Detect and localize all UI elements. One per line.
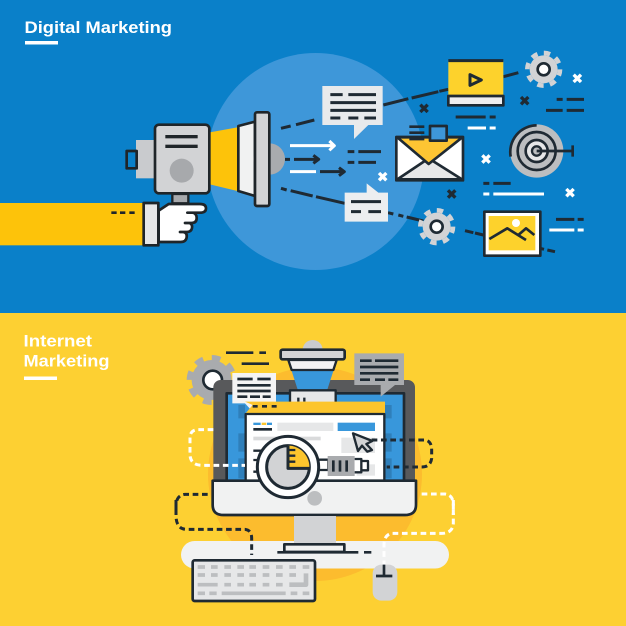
- funnel blue: [292, 371, 333, 392]
- heading underline: [24, 376, 57, 380]
- screen shadow bars: [238, 405, 392, 478]
- dashed cables: [176, 430, 453, 515]
- monitor stand: [294, 516, 336, 544]
- computer scene upper: [176, 340, 453, 515]
- gear top: [527, 53, 560, 86]
- funnel base: [290, 390, 336, 407]
- megaphone back: [136, 140, 156, 178]
- dashed cables lower: [176, 500, 453, 565]
- arm and megaphone: [0, 112, 285, 245]
- cuff: [144, 203, 158, 245]
- heading: Internet Marketing: [24, 332, 110, 370]
- mouse: [373, 565, 397, 601]
- sleeve dashes: [111, 209, 135, 217]
- light circle behind megaphone: [207, 53, 424, 270]
- cross marks: [379, 75, 581, 198]
- megaphone body: [155, 125, 209, 193]
- funnel top bar: [281, 350, 345, 359]
- handle: [172, 194, 188, 203]
- megaphone small rear rectangle: [127, 151, 137, 168]
- browser window: [246, 414, 384, 482]
- heading: Digital Marketing: Digital Marketing: [24, 18, 172, 37]
- monitor screen: [227, 393, 404, 490]
- funnel cap: [303, 340, 323, 350]
- envelope icon: [396, 126, 463, 180]
- yellow cone: [208, 127, 237, 191]
- speech bubble: gray: [354, 353, 404, 397]
- keyboard: [193, 560, 315, 601]
- text lines top: [226, 353, 269, 364]
- target icon: [510, 124, 573, 178]
- magnifier handle with plug: [317, 456, 368, 476]
- text lines right: [456, 99, 584, 230]
- video player icon: [448, 61, 503, 105]
- gear bottom: [420, 210, 453, 243]
- desk pill: [181, 541, 449, 568]
- hand: [159, 204, 206, 242]
- orange circle behind computer: [208, 367, 422, 581]
- heading: Internet Marketing: Internet: [24, 332, 92, 350]
- arrows: [285, 141, 344, 176]
- heading: Internet Marketing: Marketing: [24, 352, 110, 370]
- monitor frame: [213, 380, 415, 493]
- cursor: [353, 433, 372, 452]
- panel: digital marketing background: [0, 0, 626, 313]
- network icons: [281, 53, 584, 256]
- dashed connector lines: [281, 73, 555, 252]
- round speaker cap: [254, 143, 285, 175]
- magnifier with pie chart: [257, 436, 319, 498]
- monitor foot: [277, 544, 371, 552]
- speech bubble: bottom: [345, 183, 388, 222]
- panel: internet marketing background: [0, 313, 626, 626]
- computer scene lower: [176, 500, 453, 601]
- monitor base: [213, 481, 416, 515]
- speech bubble: white: [232, 373, 276, 412]
- gear: [189, 358, 234, 402]
- text lines beside arrows: [348, 152, 381, 162]
- browser title bar: [245, 402, 385, 414]
- white cone ring: [238, 122, 255, 196]
- sleeve: [0, 203, 143, 245]
- megaphone front bar: [255, 112, 269, 206]
- speech bubble: top: [322, 86, 383, 139]
- funnel white ring: [288, 360, 337, 370]
- image icon: [484, 212, 540, 256]
- heading underline: [25, 41, 58, 44]
